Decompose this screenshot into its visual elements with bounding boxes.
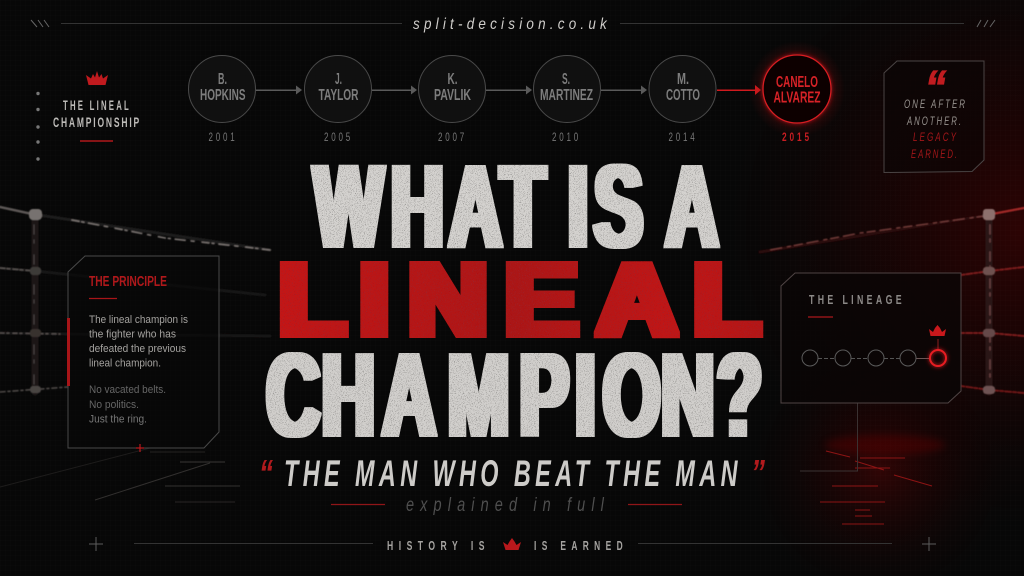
champion: Pavlik (418, 56, 486, 144)
champion: Taylor: J. (335, 71, 342, 88)
champion: Martinez: S. (562, 71, 570, 88)
champion: Hopkins (188, 56, 256, 144)
champion: Cotto: 2014 (668, 132, 698, 144)
quote text: ANOTHER. (906, 114, 963, 128)
title line 3: CHAMPION? (266, 328, 762, 461)
panel heading: THE LINEAGE (809, 292, 905, 307)
panel: quote (884, 61, 984, 172)
principle text (89, 314, 188, 426)
champion: Martinez: 2010 (552, 132, 581, 144)
panel: the lineage (781, 273, 961, 471)
quote text: EARNED. (911, 147, 959, 161)
boxing ring ropes: left (0, 207, 270, 393)
champion: Cotto: COTTO (666, 87, 700, 104)
top bar (31, 16, 995, 33)
principle text: lineal champion. (89, 358, 161, 370)
championship label: CHAMPIONSHIP (53, 114, 141, 130)
quote mark open: “ (259, 452, 273, 493)
champion: Pavlik: 2007 (438, 132, 467, 144)
champion: Pavlik: K. (448, 71, 458, 88)
champion: Martinez: MARTINEZ (540, 87, 593, 104)
icon: quote mark: “ (925, 61, 946, 113)
principle text: Just the ring. (89, 414, 147, 426)
arrows (255, 86, 647, 94)
champion: Pavlik: PAVLIK (434, 87, 472, 104)
left decorative dots (36, 92, 40, 161)
footer: IS EARNED (534, 539, 628, 553)
champion: Hopkins: 2001 (208, 132, 238, 144)
panel: the principle (67, 256, 219, 452)
principle text: No vacated belts. (89, 384, 166, 396)
footer text: HISTORY IS (387, 539, 490, 553)
champion: Hopkins: HOPKINS (200, 87, 246, 104)
icon: crown (503, 538, 521, 550)
champion: Taylor (304, 56, 372, 144)
championship label (53, 71, 141, 141)
quote mark close: ” (751, 452, 765, 493)
subtitle: explained in full (406, 495, 610, 516)
lineage timeline (188, 41, 845, 144)
icon: crown (86, 71, 108, 85)
principle text: the fighter who has (89, 328, 176, 340)
champion: Canelo Alvarez (749, 41, 845, 144)
ring floor reflections: right (820, 435, 945, 524)
lineage chain (802, 339, 946, 366)
title line 1: WHAT IS A (314, 140, 718, 272)
champion: Canelo Alvarez: CANELO (776, 74, 818, 91)
footer (89, 537, 936, 553)
top right slashes (977, 20, 995, 27)
champion: Canelo Alvarez: ALVAREZ (774, 90, 821, 106)
top left slashes (31, 20, 49, 27)
quote text (904, 97, 967, 161)
champion: Martinez (534, 56, 600, 144)
quote text: LEGACY (913, 130, 958, 144)
champion: Taylor: 2005 (324, 132, 353, 144)
icon: crown (929, 325, 946, 336)
ring floor reflections: left (0, 448, 240, 502)
champion: Cotto (649, 56, 716, 144)
panel heading: THE PRINCIPLE (89, 273, 167, 290)
principle text: defeated the previous (89, 343, 186, 355)
icon: plus (136, 444, 144, 452)
label text: THE LINEAL (63, 97, 131, 113)
icon: plus (89, 537, 936, 551)
principle text: No politics. (89, 399, 139, 411)
tagline (259, 452, 765, 494)
title line 2: LINEAL (278, 242, 761, 357)
champion: Taylor: TAYLOR (318, 87, 358, 104)
red arrow (717, 85, 761, 95)
site address: split-decision.co.uk (413, 16, 611, 33)
champion: Canelo Alvarez: 2015 (782, 132, 812, 144)
champion: Cotto: M. (677, 71, 689, 88)
boxing ring ropes: right (760, 208, 1024, 394)
main title (266, 140, 762, 461)
champion: Hopkins: B. (218, 71, 227, 88)
quote text: ONE AFTER (904, 97, 967, 111)
tagline text: THE MAN WHO BEAT THE MAN (284, 453, 742, 494)
principle text: The lineal champion is (89, 314, 188, 326)
